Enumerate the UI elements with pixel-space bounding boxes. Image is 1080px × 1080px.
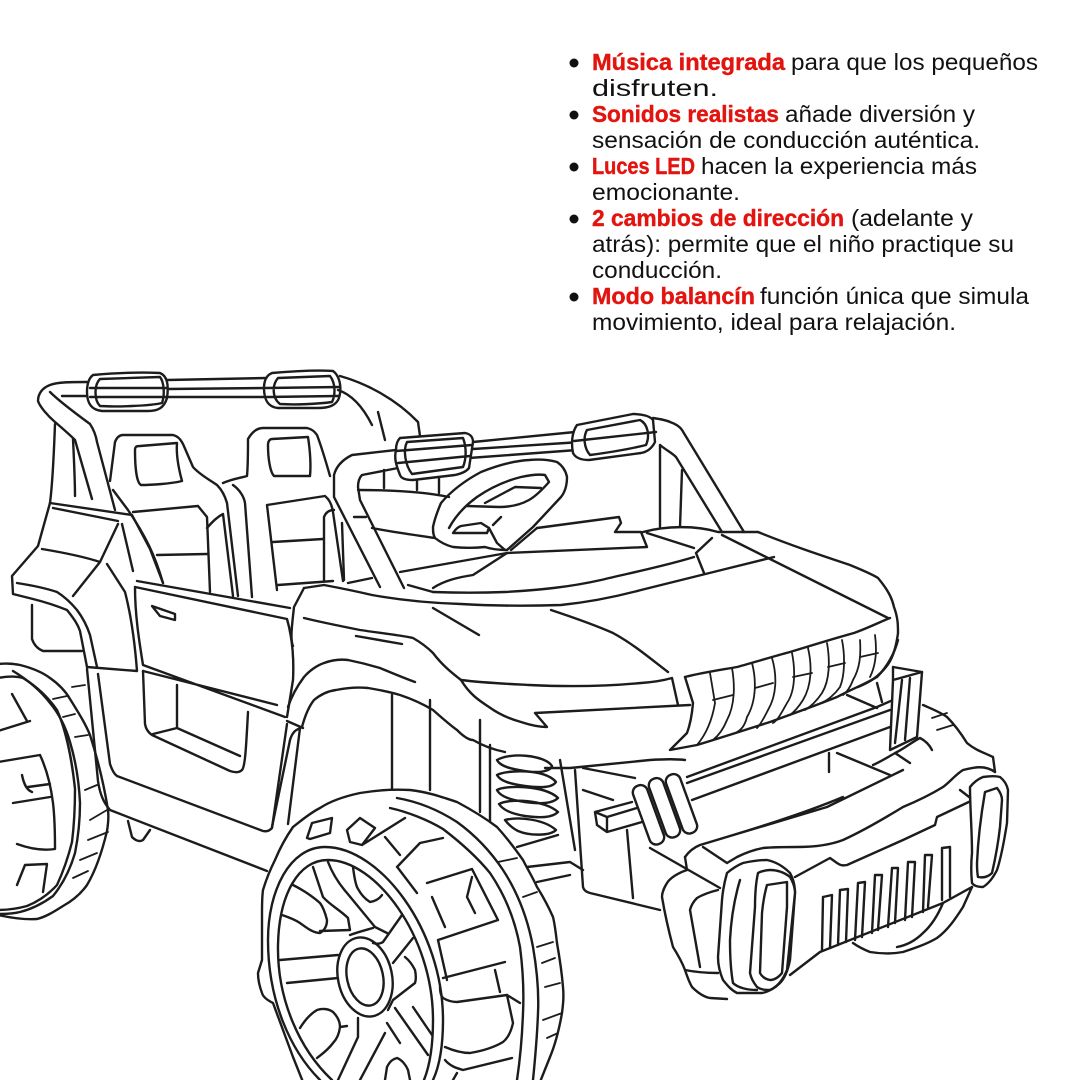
list item: Sonidos realistas: añade diversión y bbox=[785, 101, 975, 127]
grille bbox=[670, 618, 898, 750]
list item: 2 cambios de dirección bbox=[570, 205, 1014, 283]
list item: Luces LED bbox=[570, 153, 977, 205]
front wheel bbox=[258, 790, 563, 1080]
rear quarter panel bbox=[12, 503, 163, 671]
list item: Modo balancín bbox=[570, 283, 1030, 335]
list item: Música integrada: Música integrada bbox=[592, 49, 786, 75]
door bbox=[87, 581, 303, 871]
feature list bbox=[570, 49, 1038, 335]
list item: Sonidos realistas bbox=[570, 101, 980, 153]
list item: Modo balancín: movimiento, ideal para relajación. bbox=[592, 309, 956, 335]
front tire behind bumper bbox=[853, 705, 995, 954]
list item: Música integrada bbox=[570, 49, 1038, 101]
list item: Sonidos realistas: Sonidos realistas bbox=[592, 101, 779, 127]
suspension coil and chassis bbox=[480, 720, 720, 910]
list item: 2 cambios de dirección: conducción. bbox=[592, 257, 722, 283]
list item: Luces LED: emocionante. bbox=[592, 179, 740, 205]
list item: Modo balancín: Modo balancín bbox=[592, 283, 755, 309]
list item: Música integrada: para que los pequeños bbox=[791, 49, 1038, 75]
hood and fender bbox=[272, 527, 898, 827]
list item: 2 cambios de dirección: 2 cambios de dirección bbox=[592, 205, 844, 231]
list item: Luces LED: hacen la experiencia más bbox=[701, 153, 977, 179]
illustration: ride-on jeep line drawing bbox=[0, 371, 1008, 1080]
list item: Sonidos realistas: sensación de conducción auténtica. bbox=[592, 127, 980, 153]
seats bbox=[110, 428, 343, 597]
windshield frame, front light bar and steering wheel bbox=[324, 414, 744, 592]
front bumper bbox=[631, 667, 1008, 999]
rear wheel bbox=[0, 664, 108, 919]
list item: Luces LED: Luces LED bbox=[592, 153, 695, 179]
list item: 2 cambios de dirección: atrás): permite que el niño practique su bbox=[592, 231, 1014, 257]
list item: Música integrada: disfruten. bbox=[592, 75, 718, 101]
list item: 2 cambios de dirección: (adelante y bbox=[851, 205, 973, 231]
rear roll bar and light bar bbox=[38, 371, 420, 510]
list item: Modo balancín: función única que simula bbox=[760, 283, 1030, 309]
